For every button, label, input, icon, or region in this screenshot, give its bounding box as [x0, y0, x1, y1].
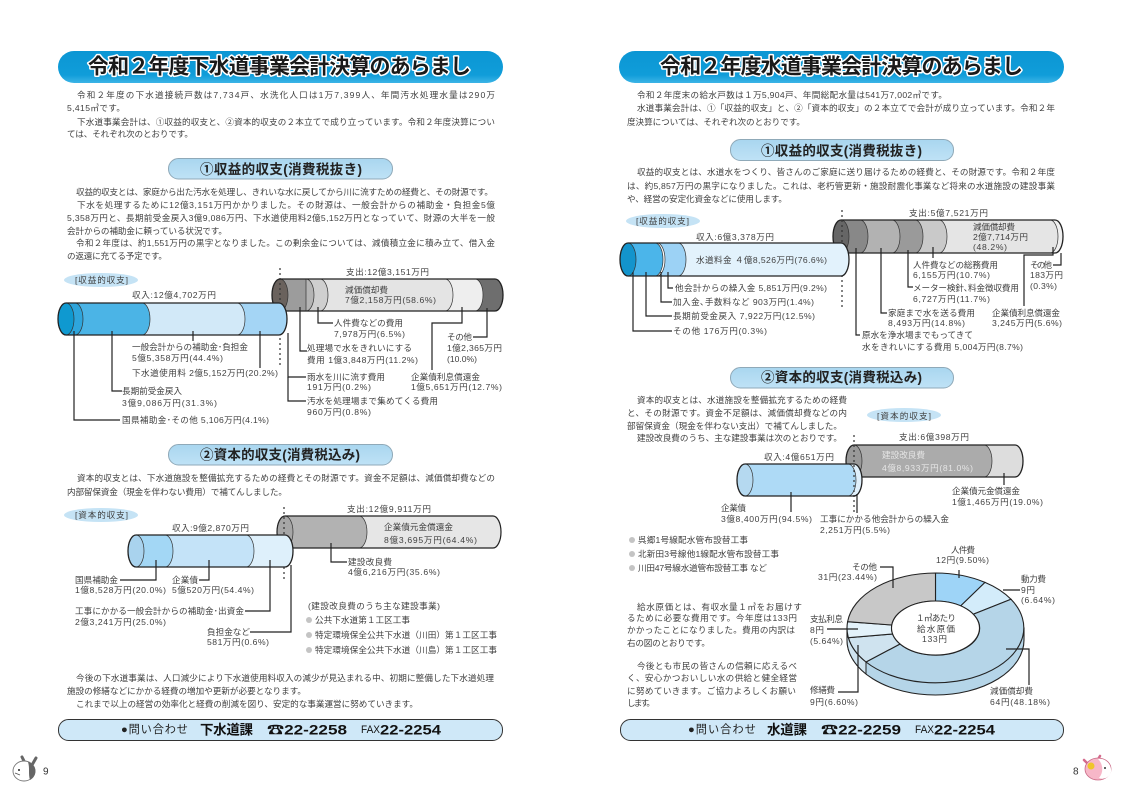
list: water construction projects: 北新田3号線他1線配水管布設替工事	[638, 548, 779, 559]
callout: sewage collection cost	[288, 377, 438, 417]
text block: sewerage intro: 5,415㎥です。	[67, 103, 125, 113]
text block: sewerage capital explanation: 資本的収支とは、下水道施設を整備拡充するための経費とその財源です。資金不足額は、減価償却費などの	[77, 472, 495, 483]
callout: bond principal repayment: 企業債元金償還金	[952, 485, 1020, 496]
label: water capital expense total: 支出:6億398万円	[899, 431, 969, 442]
callout: construction subsidy	[75, 560, 270, 627]
callout: long-term deferred income	[112, 331, 217, 408]
callout: depreciation	[990, 649, 1050, 707]
callout: long-term deferred income: 長期前受金戻入	[122, 385, 182, 396]
callout: construction subsidy: 2億3,241万円(25.0%)	[75, 616, 166, 627]
callout: other: その他	[852, 561, 877, 572]
callout: treatment plant cost: 費用 1億3,848万円(11.2%)	[307, 354, 418, 365]
callout: interest: (5.64%)	[810, 636, 843, 646]
text block: water supply cost explanation: かかったことになりました。費用の内訳は	[627, 624, 795, 635]
label: water income total: 収入:6億3,378万円	[696, 231, 774, 242]
heading: water capital section: ②資本的収支(消費税込み)	[761, 369, 922, 385]
text block: sewerage revenue explanation: 下水を処理するために12億3,151万円かかりました。その財源は、一般会計からの補助金・負担金5億	[77, 199, 495, 210]
callout: sewer fees: 下水道使用料 2億5,152万円(20.2%)	[132, 367, 278, 378]
callout: other expenses	[1030, 253, 1063, 291]
text block: sewerage revenue explanation: 収益的収支とは、家庭から出た汚水を処理し、きれいな水に戻してから川に流すための経費と、その財源です。	[76, 186, 493, 197]
callout: personnel cost	[318, 307, 405, 339]
callout: national subsidy: 国県補助金	[75, 574, 118, 585]
icon: grey mascot	[13, 757, 36, 781]
callout: interest: 支払利息	[810, 613, 843, 624]
callout: bond interest	[992, 247, 1062, 328]
icon: pink mascot	[1084, 756, 1111, 780]
callout: bond principal repayment: 1億1,465万円(19.0%)	[952, 496, 1043, 507]
wedge: depreciation	[866, 599, 1024, 683]
panel: water supply page	[619, 51, 1111, 780]
text block: water revenue explanation: や、経営の安定化資金などに使用します。	[627, 193, 787, 204]
text block: sewerage revenue explanation: 令和２年度は、約1,551万円の黒字となりました。この剰余金については、減債積立金に積み立て、借入金	[76, 237, 495, 248]
callout: general account subsidy: 5億5,358万円(44.4%)	[132, 352, 223, 363]
label: water revenue chart tag	[626, 214, 700, 228]
callout: personnel cost: 人件費などの費用	[334, 317, 403, 328]
callout: depreciation: 64円(48.18%)	[990, 697, 1050, 707]
text block: water intro	[627, 89, 1055, 127]
contact bar: sewerage	[58, 720, 502, 740]
heading: water revenue section	[730, 140, 954, 160]
callout: raw water and purification cost: 水をきれいにする費用 5,004万円(8.7%)	[862, 341, 1023, 352]
callout: construction improvements: 建設改良費	[348, 556, 392, 567]
text block: sewerage outlook: 施設の修繕などにかかる経費の増加や更新が必要となります。	[67, 685, 306, 696]
text block: water capital explanation: 建設改良費のうち、主な建設事業は次のとおりです。	[637, 432, 842, 443]
side wall: repairs segment	[847, 628, 866, 674]
callout: transfers for construction: 工事にかかる他会計からの繰入金	[820, 513, 949, 524]
title: water supply: 令和２年度水道事業会計決算のあらまし	[660, 54, 1023, 78]
cylinder: water capital expenses 6億398万円: 建設改良費	[882, 449, 925, 460]
text block: water closing message: します。	[627, 698, 655, 708]
contact bar: water: ☎22-2259	[821, 722, 901, 738]
list: main construction projects: (建設改良費のうち主な建設事業)	[308, 600, 440, 611]
label: revenue chart tag	[64, 273, 138, 287]
contact bar: sewerage: FAX	[361, 724, 381, 736]
callout: bond interest: 1億5,651万円(12.7%)	[411, 381, 502, 392]
text block: water intro: 令和２年度末の給水戸数は１万5,904戸、年間総配水量は541万7,002㎥です。	[637, 89, 947, 100]
label: income total: 収入:12億4,702万円	[132, 289, 216, 300]
label: water revenue chart tag: [収益的収支]	[636, 215, 689, 226]
callout: other expenses: 1億2,365万円	[447, 342, 502, 353]
label: water expense total: 支出:5億7,521万円	[909, 207, 988, 218]
text block: water intro: 水道事業会計は、①「収益的収支」と、②「資本的収支」の２本立てで会計が成り立っています。令和２年	[637, 102, 1055, 113]
label: water capital income total: 収入:4億651万円	[764, 451, 834, 462]
callout: bonds	[172, 560, 254, 595]
callout: other income: その他 176万円(0.3%)	[673, 325, 767, 336]
chart: donut of water supply cost	[810, 544, 1055, 707]
text block: water supply cost explanation	[627, 601, 802, 648]
callout: transfers from other accounts: 他会計からの繰入金 5,851万円(9.2%)	[675, 282, 827, 293]
text block: sewerage intro: ては、それぞれ次のとおりです。	[67, 128, 193, 139]
text block: sewerage capital explanation	[67, 472, 495, 497]
donut center label	[892, 601, 980, 655]
callout: other expenses: その他	[447, 331, 472, 342]
callout: personnel: 12円(9.50%)	[936, 555, 989, 565]
callout: personnel	[936, 544, 989, 578]
text block: water closing message: く、安心かつおいしい水の供給と健全経営	[627, 672, 797, 683]
callout: repairs: 9円(6.60%)	[810, 697, 858, 707]
cylinder: capital expenses 12億9,911万円: 企業債元金償還金	[384, 521, 453, 532]
list: main construction projects	[306, 600, 497, 655]
text block: sewerage revenue explanation: の返還に充てる予定です。	[67, 250, 167, 261]
cylinder: water expenses 5億7,521万円: 減価償却費	[973, 221, 1015, 232]
callout: transfers for construction: 2,251万円(5.5%)	[820, 525, 890, 535]
callout: administrative personnel cost	[913, 247, 998, 280]
callout: national and prefectural subsidy	[74, 331, 269, 425]
callout: interest	[810, 613, 858, 646]
contact bar: water: 水道課	[767, 722, 808, 738]
callout: power: 9円	[1021, 585, 1035, 595]
callout: administrative personnel cost: 6,155万円(10.7%)	[913, 270, 990, 280]
chart: sewerage capital cylinders	[64, 503, 501, 655]
callout: other: 31円(23.44%)	[818, 572, 877, 582]
text block: water closing message	[627, 660, 797, 708]
label: water capital chart tag: [資本的収支]	[877, 410, 931, 421]
callout: other expenses: (0.3%)	[1030, 281, 1057, 291]
label: capital chart tag	[64, 508, 138, 522]
callout: general account subsidy	[132, 331, 248, 363]
callout: contributions: 581万円(0.6%)	[207, 637, 269, 647]
callout: bonds: 企業債	[172, 574, 198, 585]
donut side wall	[847, 628, 1024, 695]
cylinder: expenses 12億3,151万円: 7億2,158万円(58.6%)	[345, 294, 436, 305]
callout: interest: 8円	[810, 625, 824, 635]
callout: construction improvements	[331, 543, 440, 577]
text block: sewerage revenue explanation: 会計からの補助金に頼っている状況です。	[67, 225, 227, 236]
callout: distribution cost	[881, 248, 975, 328]
cylinder: expenses 12億3,151万円	[272, 279, 503, 311]
callout: transfers from other accounts	[668, 272, 827, 293]
text block: water supply cost explanation: るために必要な費用です。今年度は133円	[627, 612, 797, 623]
callout: general account subsidy: 一般会計からの補助金･負担金	[132, 341, 248, 352]
callout: treatment plant cost	[300, 307, 418, 365]
callout: bonds: 企業債	[721, 502, 746, 513]
donut center label: 133円	[922, 634, 947, 644]
callout: contributions: 負担金など	[207, 626, 250, 637]
callout: other	[818, 561, 893, 588]
text block: sewerage outlook: これまで以上の経営の効率化と経費の削減を図り、安定的な事業運営に努めていきます。	[76, 698, 418, 709]
contact bar: sewerage: ●問い合わせ	[121, 723, 188, 736]
callout: bond interest: 3,245万円(5.6%)	[992, 318, 1062, 328]
text block: sewerage outlook	[67, 672, 494, 709]
callout: construction improvements: 4億6,216万円(35.6%)	[348, 566, 440, 577]
title: water supply	[619, 51, 1064, 83]
callout: subscription fees: 加入金､手数料など 903万円(1.4%)	[673, 296, 814, 307]
label: capital chart tag: [資本的収支]	[75, 509, 128, 520]
heading: sewerage revenue section	[168, 158, 392, 179]
callout: repairs	[810, 645, 858, 707]
text block: sewerage intro: 令和２年度の下水道接続戸数は7,734戸、水洗化人口は1万7,399人、年間汚水処理水量は290万	[77, 89, 495, 100]
callout: administrative personnel cost: 人件費などの総務費用	[913, 259, 998, 270]
callout: distribution cost: 8,493万円(14.8%)	[888, 318, 965, 328]
contact bar: water: FAX	[915, 724, 935, 736]
callout: national subsidy	[75, 560, 166, 595]
wedge: power	[961, 582, 1011, 614]
page number 9: 9	[43, 766, 49, 778]
callout: repairs: 修繕費	[810, 684, 835, 695]
chart: water revenue cylinders	[620, 207, 1063, 352]
callout: other expenses: その他	[1030, 259, 1052, 270]
cylinder: capital expenses 12億9,911万円	[277, 516, 501, 548]
callout: bonds	[721, 492, 812, 524]
callout: rainwater cost: 雨水を川に流す費用	[307, 371, 385, 382]
callout: raw water and purification cost	[856, 248, 1023, 352]
heading: sewerage capital section	[168, 444, 392, 465]
callout: long-term deferred income: 長期前受金戻入 7,922万円(12.5%)	[673, 310, 815, 321]
heading: water revenue section: ①収益的収支(消費税抜き)	[761, 142, 922, 158]
callout: treatment plant cost: 処理場で水をきれいにする	[307, 342, 412, 353]
text block: water intro: 度決算については、それぞれ次のとおりです。	[627, 116, 805, 127]
text block: sewerage capital explanation: 内部留保資金（現金を伴わない費用）で補てんしました。	[67, 486, 287, 497]
text block: sewerage revenue explanation: 5,358万円と、長期前受金戻入3億9,086万円、下水道使用料2億5,152万円となっていて、財源の大半を一般	[67, 212, 495, 223]
callout: bond interest	[411, 307, 502, 392]
wedge: repairs	[848, 634, 900, 662]
chart: sewerage revenue cylinders	[58, 266, 503, 425]
text block: water supply cost explanation: 右の図のとおりです。	[627, 637, 710, 648]
page number 8: 8	[1073, 766, 1079, 778]
text block: sewerage intro	[67, 89, 495, 139]
callout: rainwater cost: 191万円(0.2%)	[307, 382, 371, 392]
text block: water closing message: 今後とも市民の皆さんの信頼に応えるべ	[637, 660, 797, 671]
cylinder: water income 6億3,378万円	[620, 243, 849, 276]
text block: sewerage outlook: 今後の下水道事業は、人口減少により下水道使用料収入の減少が見込まれる中、初期に整備した下水道処理	[76, 672, 494, 683]
callout: sewage collection cost: 960万円(0.8%)	[307, 407, 371, 417]
callout: subscription fees	[661, 272, 814, 307]
label: expense total: 支出:12億3,151万円	[346, 266, 429, 277]
list: water construction projects	[629, 534, 779, 573]
text block: water capital explanation: と、その財源です。資金不足額は、減価償却費などの内	[627, 407, 847, 418]
label: capital income total: 収入:9億2,870万円	[172, 522, 249, 533]
list: water construction projects: 川田47号線水道管布設替工事 など	[638, 562, 767, 573]
title: sewerage	[58, 51, 503, 83]
callout: depreciation: 減価償却費	[990, 685, 1033, 696]
text block: water capital explanation	[627, 394, 847, 443]
contact bar: sewerage: 22-2254	[380, 722, 442, 738]
callout: meter reading cost	[908, 250, 1019, 304]
callout: power: (6.64%)	[1021, 595, 1055, 605]
callout: distribution cost: 家庭まで水を送る費用	[888, 307, 975, 318]
callout: other expenses: 183万円	[1030, 270, 1063, 280]
callout: personnel cost: 7,978万円(6.5%)	[334, 329, 405, 339]
callout: bonds: 5億520万円(54.4%)	[172, 584, 254, 595]
wedge: interest	[847, 622, 893, 638]
panel: sewerage page	[13, 51, 503, 781]
callout: sewage collection cost: 汚水を処理場まで集めてくる費用	[307, 395, 438, 406]
text block: sewerage revenue explanation	[67, 186, 495, 261]
contact bar: sewerage: 下水道課	[200, 722, 254, 738]
callout: national and prefectural subsidy: 国県補助金･その他 5,106万円(4.1%)	[122, 414, 269, 425]
donut center label: 給水原価	[917, 623, 955, 634]
callout: long-term deferred income: 3億9,086万円(31.3%)	[122, 397, 217, 408]
label: revenue chart tag: [収益的収支]	[75, 274, 128, 285]
callout: other income	[633, 272, 767, 336]
heading: sewerage capital section: ②資本的収支(消費税込み)	[200, 446, 360, 462]
callout: other expenses	[447, 308, 502, 364]
chart: water capital cylinders	[721, 408, 1043, 535]
callout: contributions	[207, 565, 291, 647]
callout: power	[1003, 573, 1055, 605]
contact bar: sewerage: ☎22-2258	[267, 722, 348, 738]
cylinder: water capital expenses 6億398万円: 4億8,933万円(81.0%)	[882, 462, 973, 473]
cylinder: capital income 9億2,870万円	[128, 535, 293, 567]
cylinder: income 12億4,702万円	[58, 303, 287, 335]
wedge: personnel	[936, 573, 985, 606]
callout: power: 動力費	[1021, 573, 1046, 584]
callout: bond principal repayment	[952, 473, 1043, 507]
cylinder: water income 6億3,378万円: 水道料金 ４億8,526万円(76.6%)	[696, 254, 827, 265]
callout: other expenses: (10.0%)	[447, 354, 477, 364]
callout: national subsidy: 1億8,528万円(20.0%)	[75, 584, 166, 595]
title: sewerage: 令和２年度下水道事業会計決算のあらまし	[88, 54, 471, 78]
callout: bond interest: 企業債利息償還金	[411, 371, 480, 382]
text block: water revenue explanation: 収益的収支とは、水道水をつくり、皆さんのご家庭に送り届けるための経費と、その財源です。令和２年度	[637, 166, 1055, 177]
text block: water capital explanation: 部留保資金（現金を伴わない支出）で補てんしました。	[627, 420, 842, 431]
donut center label: １㎥あたり	[916, 613, 956, 623]
cylinder: capital expenses 12億9,911万円: 8億3,695万円(64.4%)	[384, 534, 477, 545]
text block: water revenue explanation	[627, 166, 1055, 204]
list: water construction projects: 呉郷1号線配水管布設替工事	[638, 534, 748, 545]
text block: water revenue explanation: は、約5,857万円の黒字になりました。これは、老朽管更新・施設耐震化事業など将来の水道施設の建設事業	[627, 180, 1055, 191]
cylinder: water capital expenses 6億398万円	[846, 445, 1023, 477]
heading: sewerage revenue section: ①収益的収支(消費税抜き)	[200, 161, 362, 177]
callout: personnel: 人件費	[951, 544, 975, 555]
contact bar: water: 22-2254	[934, 722, 996, 738]
callout: rainwater cost	[288, 333, 385, 392]
text block: sewerage intro: 下水道事業会計は、①収益的収支と、②資本的収支の２本立てで成り立っています。令和２年度決算につい	[77, 116, 495, 127]
callout: transfers for construction	[820, 494, 949, 535]
heading: water capital section	[730, 368, 954, 388]
cylinder: water expenses 5億7,521万円	[833, 220, 1063, 253]
cylinder: expenses 12億3,151万円: 減価償却費	[345, 284, 388, 295]
callout: construction subsidy: 工事にかかる一般会計からの補助金･出資金	[75, 605, 244, 616]
text block: water closing message: に努めていきます。ご協力よろしくお願い	[627, 685, 796, 696]
callout: raw water and purification cost: 原水を浄水場までもってきて	[862, 329, 973, 340]
contact bar: water: ●問い合わせ	[688, 723, 756, 736]
cylinder: water expenses 5億7,521万円: (48.2%)	[973, 242, 1007, 252]
callout: meter reading cost: 6,727万円(11.7%)	[913, 294, 990, 304]
callout: long-term deferred income	[646, 272, 815, 321]
list: main construction projects: 公共下水道第１工区工事	[315, 614, 410, 625]
callout: bond interest: 企業債利息償還金	[992, 307, 1060, 318]
cylinder: water capital income 4億651万円	[737, 464, 862, 496]
callout: meter reading cost: メーター検針､料金徴収費用	[913, 282, 1019, 293]
wedge: other	[848, 573, 936, 625]
contact bar: water	[620, 720, 1064, 740]
text block: water supply cost explanation: 給水原価とは、有収水量１㎥をお届けす	[637, 601, 802, 612]
callout: bonds: 3億8,400万円(94.5%)	[721, 513, 812, 524]
list: main construction projects: 特定環境保全公共下水道（川田）第１工区工事	[315, 629, 497, 640]
text block: water capital explanation: 資本的収支とは、水道施設を整備拡充するための経費	[637, 394, 847, 405]
label: capital expense total: 支出:12億9,911万円	[347, 503, 431, 514]
cylinder: water expenses 5億7,521万円: 2億7,714万円	[973, 231, 1028, 242]
label: water capital chart tag	[867, 408, 941, 422]
list: main construction projects: 特定環境保全公共下水道（川島）第１工区工事	[315, 644, 497, 655]
